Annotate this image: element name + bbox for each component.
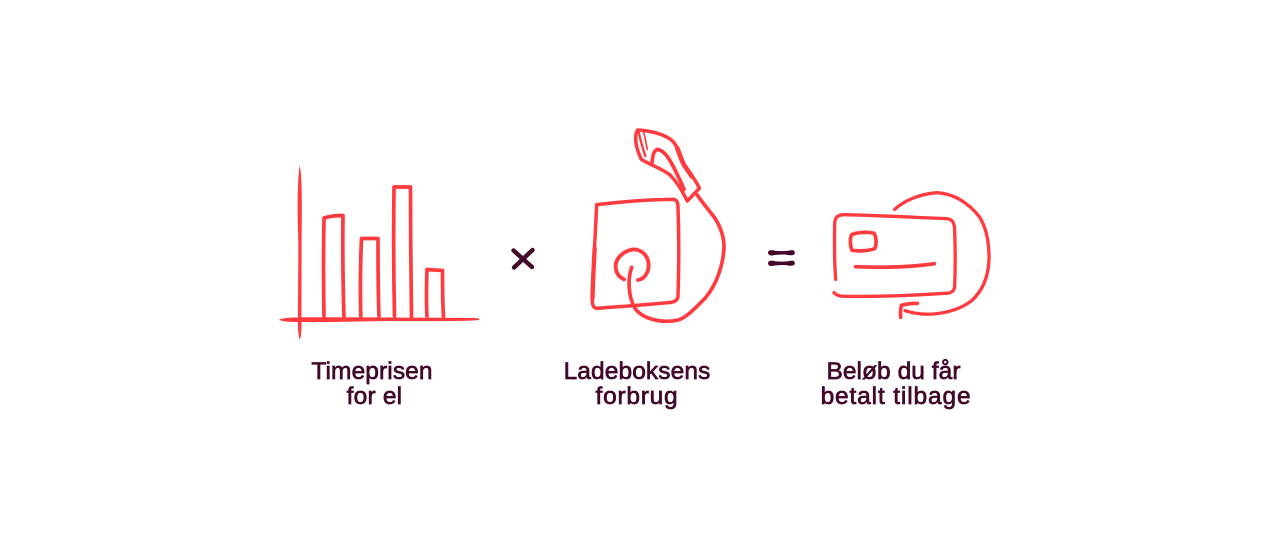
chart axes — [280, 166, 480, 340]
label: charging box consumption: forbrug — [596, 383, 678, 410]
chip — [850, 232, 876, 251]
multiply sign — [514, 250, 532, 268]
icon: charging box with cable and plug — [592, 130, 724, 321]
label: amount paid back — [821, 358, 971, 410]
cable — [629, 195, 724, 321]
card outline — [834, 215, 955, 296]
label: hourly electricity price: Timeprisen — [311, 358, 433, 385]
card stripe — [856, 264, 934, 267]
label: charging box consumption: Ladeboksens — [564, 358, 710, 385]
equals sign — [768, 250, 795, 266]
box left edge thickening — [592, 248, 595, 298]
label: amount paid back: Beløb du får — [826, 358, 961, 385]
label: charging box consumption — [564, 358, 710, 410]
label: hourly electricity price — [311, 358, 433, 410]
label: amount paid back: betalt tilbage — [821, 383, 971, 410]
cable socket — [616, 249, 649, 280]
icon: bar chart — [280, 166, 480, 340]
return arrow — [895, 193, 989, 314]
label: hourly electricity price: for el — [347, 383, 402, 410]
icon: payment card with return arrow — [834, 193, 989, 317]
chart bars — [324, 187, 444, 317]
plug ridge thickening — [677, 148, 692, 177]
box outline — [592, 199, 679, 308]
charging plug — [636, 130, 699, 201]
